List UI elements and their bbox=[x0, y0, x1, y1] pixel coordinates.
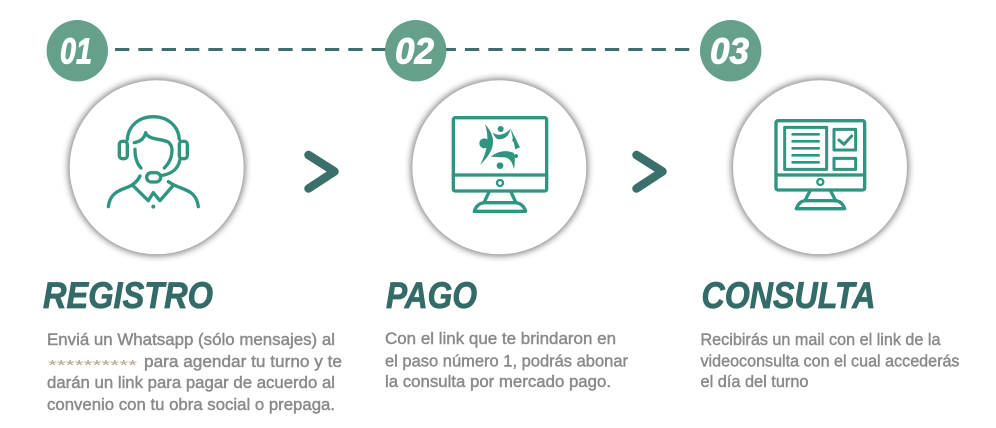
badge 03: 03 bbox=[710, 30, 749, 72]
text block: registro description bbox=[47, 330, 342, 414]
badge 01: 01 bbox=[60, 30, 92, 72]
text block: pago description: el paso número 1, podrás abonar bbox=[385, 352, 628, 370]
logo mark bbox=[479, 124, 520, 169]
badge 02: 02 bbox=[395, 30, 434, 72]
heading: registro: REGISTRO bbox=[43, 275, 213, 316]
panel: step 1 registro bbox=[43, 20, 342, 414]
white circle with headset icon bbox=[68, 79, 245, 256]
text block: registro description: darán un link para pagar de acuerdo al bbox=[47, 373, 335, 392]
text block: consulta description: Recibirás un mail con el link de la bbox=[700, 330, 941, 349]
icon: monitor with logo bbox=[453, 118, 547, 211]
dashed connector line bbox=[115, 48, 697, 51]
icon: monitor with form and check bbox=[776, 121, 865, 209]
arrow: chevron 1 bbox=[308, 155, 334, 188]
heading: consulta: CONSULTA bbox=[702, 275, 876, 316]
badge 01 bbox=[47, 20, 108, 81]
panel: step 3 consulta bbox=[700, 20, 960, 391]
text block: registro description: ********** bbox=[48, 357, 137, 374]
text block: consulta description bbox=[700, 330, 960, 391]
arrow: chevron 2 bbox=[636, 155, 662, 188]
white circle with monitor icon bbox=[411, 79, 588, 256]
text block: registro description: Enviá un Whatsapp (sólo mensajes) al bbox=[47, 330, 335, 349]
text block: registro description: para agendar tu turno y te bbox=[144, 352, 342, 371]
text block: consulta description: el día del turno bbox=[700, 372, 808, 391]
badge 03 bbox=[700, 20, 761, 81]
text block: pago description: la consulta por mercado pago. bbox=[385, 372, 611, 391]
heading: pago: PAGO bbox=[386, 275, 477, 316]
icon: person with headset bbox=[108, 117, 198, 209]
badge 02 bbox=[385, 20, 446, 81]
text block: consulta description: videoconsulta con el cual accederás bbox=[700, 352, 960, 370]
white circle with form monitor icon bbox=[732, 79, 908, 256]
text block: registro description: convenio con tu obra social o prepaga. bbox=[47, 395, 335, 414]
text block: pago description bbox=[385, 329, 628, 391]
panel: step 2 pago bbox=[385, 20, 628, 391]
text block: pago description: Con el link que te brindaron en bbox=[385, 329, 616, 348]
